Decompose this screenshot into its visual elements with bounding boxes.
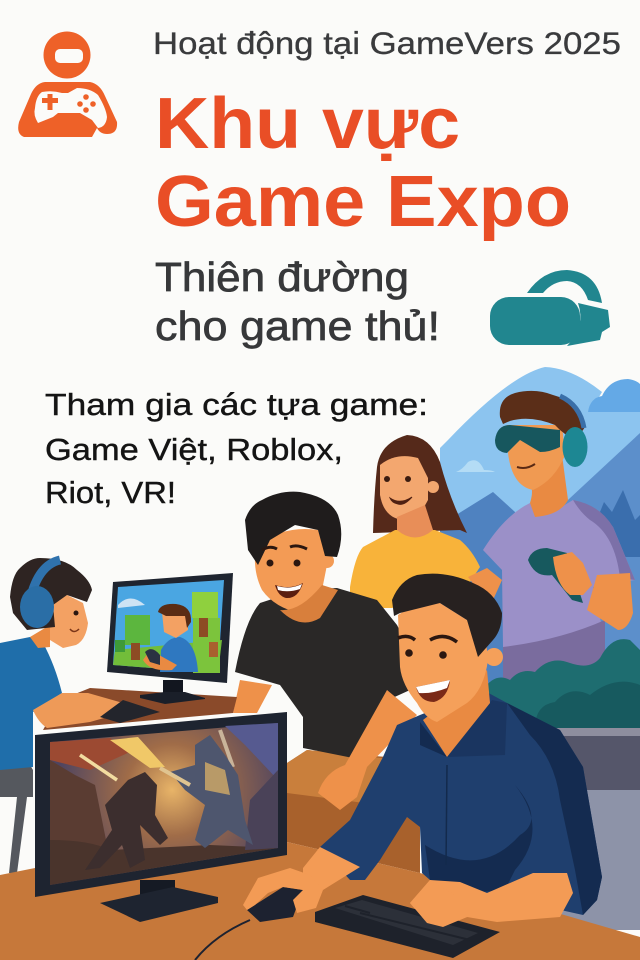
warrior right [170,735,253,848]
chair [0,710,33,873]
background: bushes [483,639,640,728]
icon: VR headset [490,270,610,346]
desk: raised rear wood block [287,750,420,873]
icon: rear keyboard [100,700,160,723]
text block: game list [45,387,428,510]
left forearm [303,847,360,890]
title [155,84,571,242]
monitor: front battle game screen [35,712,287,922]
subtitle: cho game thủ! [155,303,440,349]
warrior left [85,772,168,870]
person: VR player in purple shirt [483,391,635,690]
monitor: rear Roblox-style game screen [107,573,233,704]
right forearm and hand [410,873,573,927]
text block: game list: Tham gia các tựa game: [45,387,428,422]
text block: game list: Game Việt, Roblox, [45,432,343,467]
text block: game list: Riot, VR! [45,475,176,510]
person: woman in yellow shirt [350,435,502,608]
desk: rear brown desk [43,688,237,730]
subtitle [155,254,440,349]
title: Game Expo [155,162,571,242]
subtitle: Thiên đường [155,254,409,300]
cloud [588,379,640,412]
person: boy in black shirt [233,492,417,810]
title: Khu vực [155,84,460,164]
background: mountains and sky [440,367,640,930]
person: man in navy shirt [303,574,602,927]
icon: mouse [195,868,323,960]
icon: gamer with controller [18,32,117,137]
icon: front keyboard [315,880,500,958]
heading: event line: Hoạt động tại GameVers 2025 [153,25,621,61]
desk: front wood desk [0,842,640,960]
person: kid with headset at left [0,558,123,873]
